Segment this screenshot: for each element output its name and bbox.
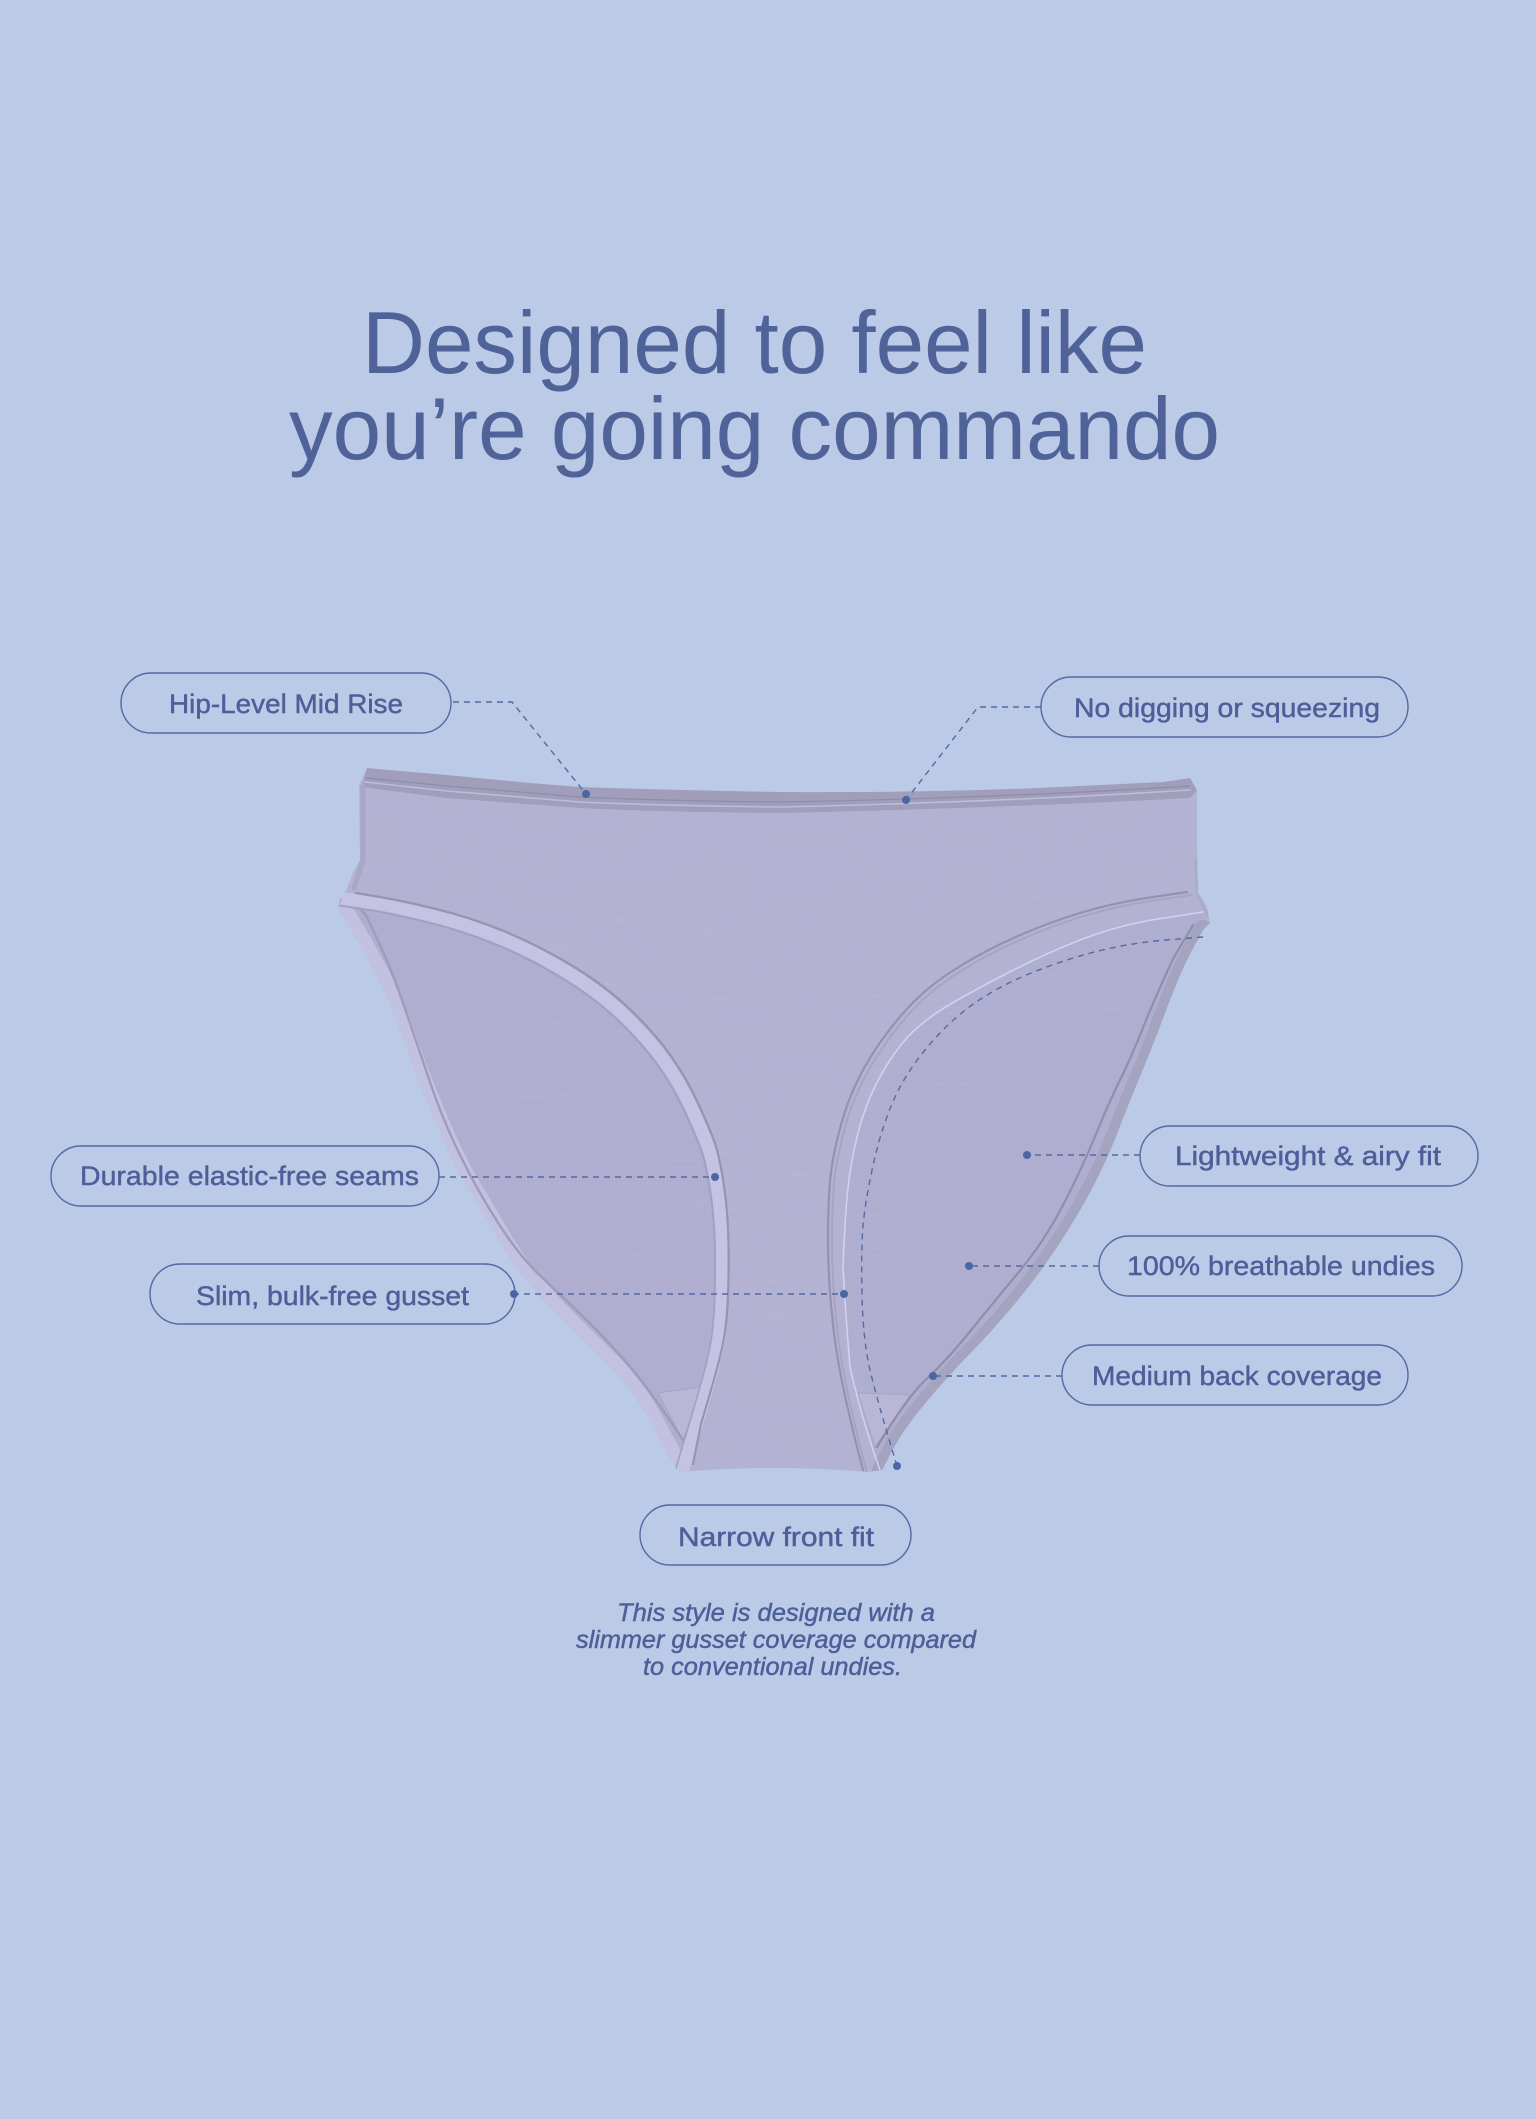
fabric texture: [330, 760, 1220, 1480]
left leg seam: [339, 899, 722, 1471]
callout: No digging or squeezing: [902, 677, 1408, 804]
waistband side stitching: [354, 786, 363, 888]
callout: No digging or squeezing: No digging or squeezing: [1074, 693, 1380, 723]
left back panel: [338, 898, 723, 1470]
callout: Lightweight and airy fit: [1023, 1126, 1478, 1186]
callout: 100% breathable undies: 100% breathable undies: [1127, 1251, 1435, 1281]
callout: Lightweight and airy fit: Lightweight & airy fit: [1175, 1141, 1442, 1171]
waistband: [362, 768, 1197, 813]
caption: [576, 1599, 977, 1681]
callout: Medium back coverage: [929, 1345, 1408, 1405]
caption: to conventional undies.: [643, 1653, 902, 1681]
left outer leg binding: [338, 908, 677, 1470]
right outer leg binding: [882, 930, 1203, 1470]
title: [289, 293, 1220, 478]
gusset pieces: [658, 1387, 910, 1447]
garment body: [338, 768, 1210, 1472]
callout: Narrow front fit: [640, 937, 1203, 1565]
caption: This style is designed with a: [617, 1599, 935, 1627]
callout: 100% breathable undies: [965, 1236, 1462, 1296]
garment illustration: briefs: [330, 760, 1220, 1480]
callout: Durable elastic-free seams: Durable elastic-free seams: [80, 1161, 419, 1191]
right leg seam: [828, 892, 1187, 1470]
callout: Slim, bulk-free gusset: Slim, bulk-free gusset: [196, 1281, 470, 1311]
callout: Slim, bulk-free gusset: [150, 1264, 848, 1324]
caption: slimmer gusset coverage compared: [576, 1626, 977, 1654]
title: Designed to feel like: [362, 293, 1147, 392]
callout: Medium back coverage: Medium back coverage: [1092, 1361, 1382, 1391]
callout: Hip-Level Mid Rise: Hip-Level Mid Rise: [169, 689, 403, 719]
edge bindings and waistband: [338, 768, 1207, 1473]
title: you’re going commando: [289, 379, 1220, 478]
right back panel: [843, 912, 1203, 1470]
callout: Durable elastic-free seams: [51, 1146, 719, 1206]
callout: Hip-Level Mid Rise: [121, 673, 590, 798]
callout: Narrow front fit: Narrow front fit: [678, 1522, 875, 1552]
